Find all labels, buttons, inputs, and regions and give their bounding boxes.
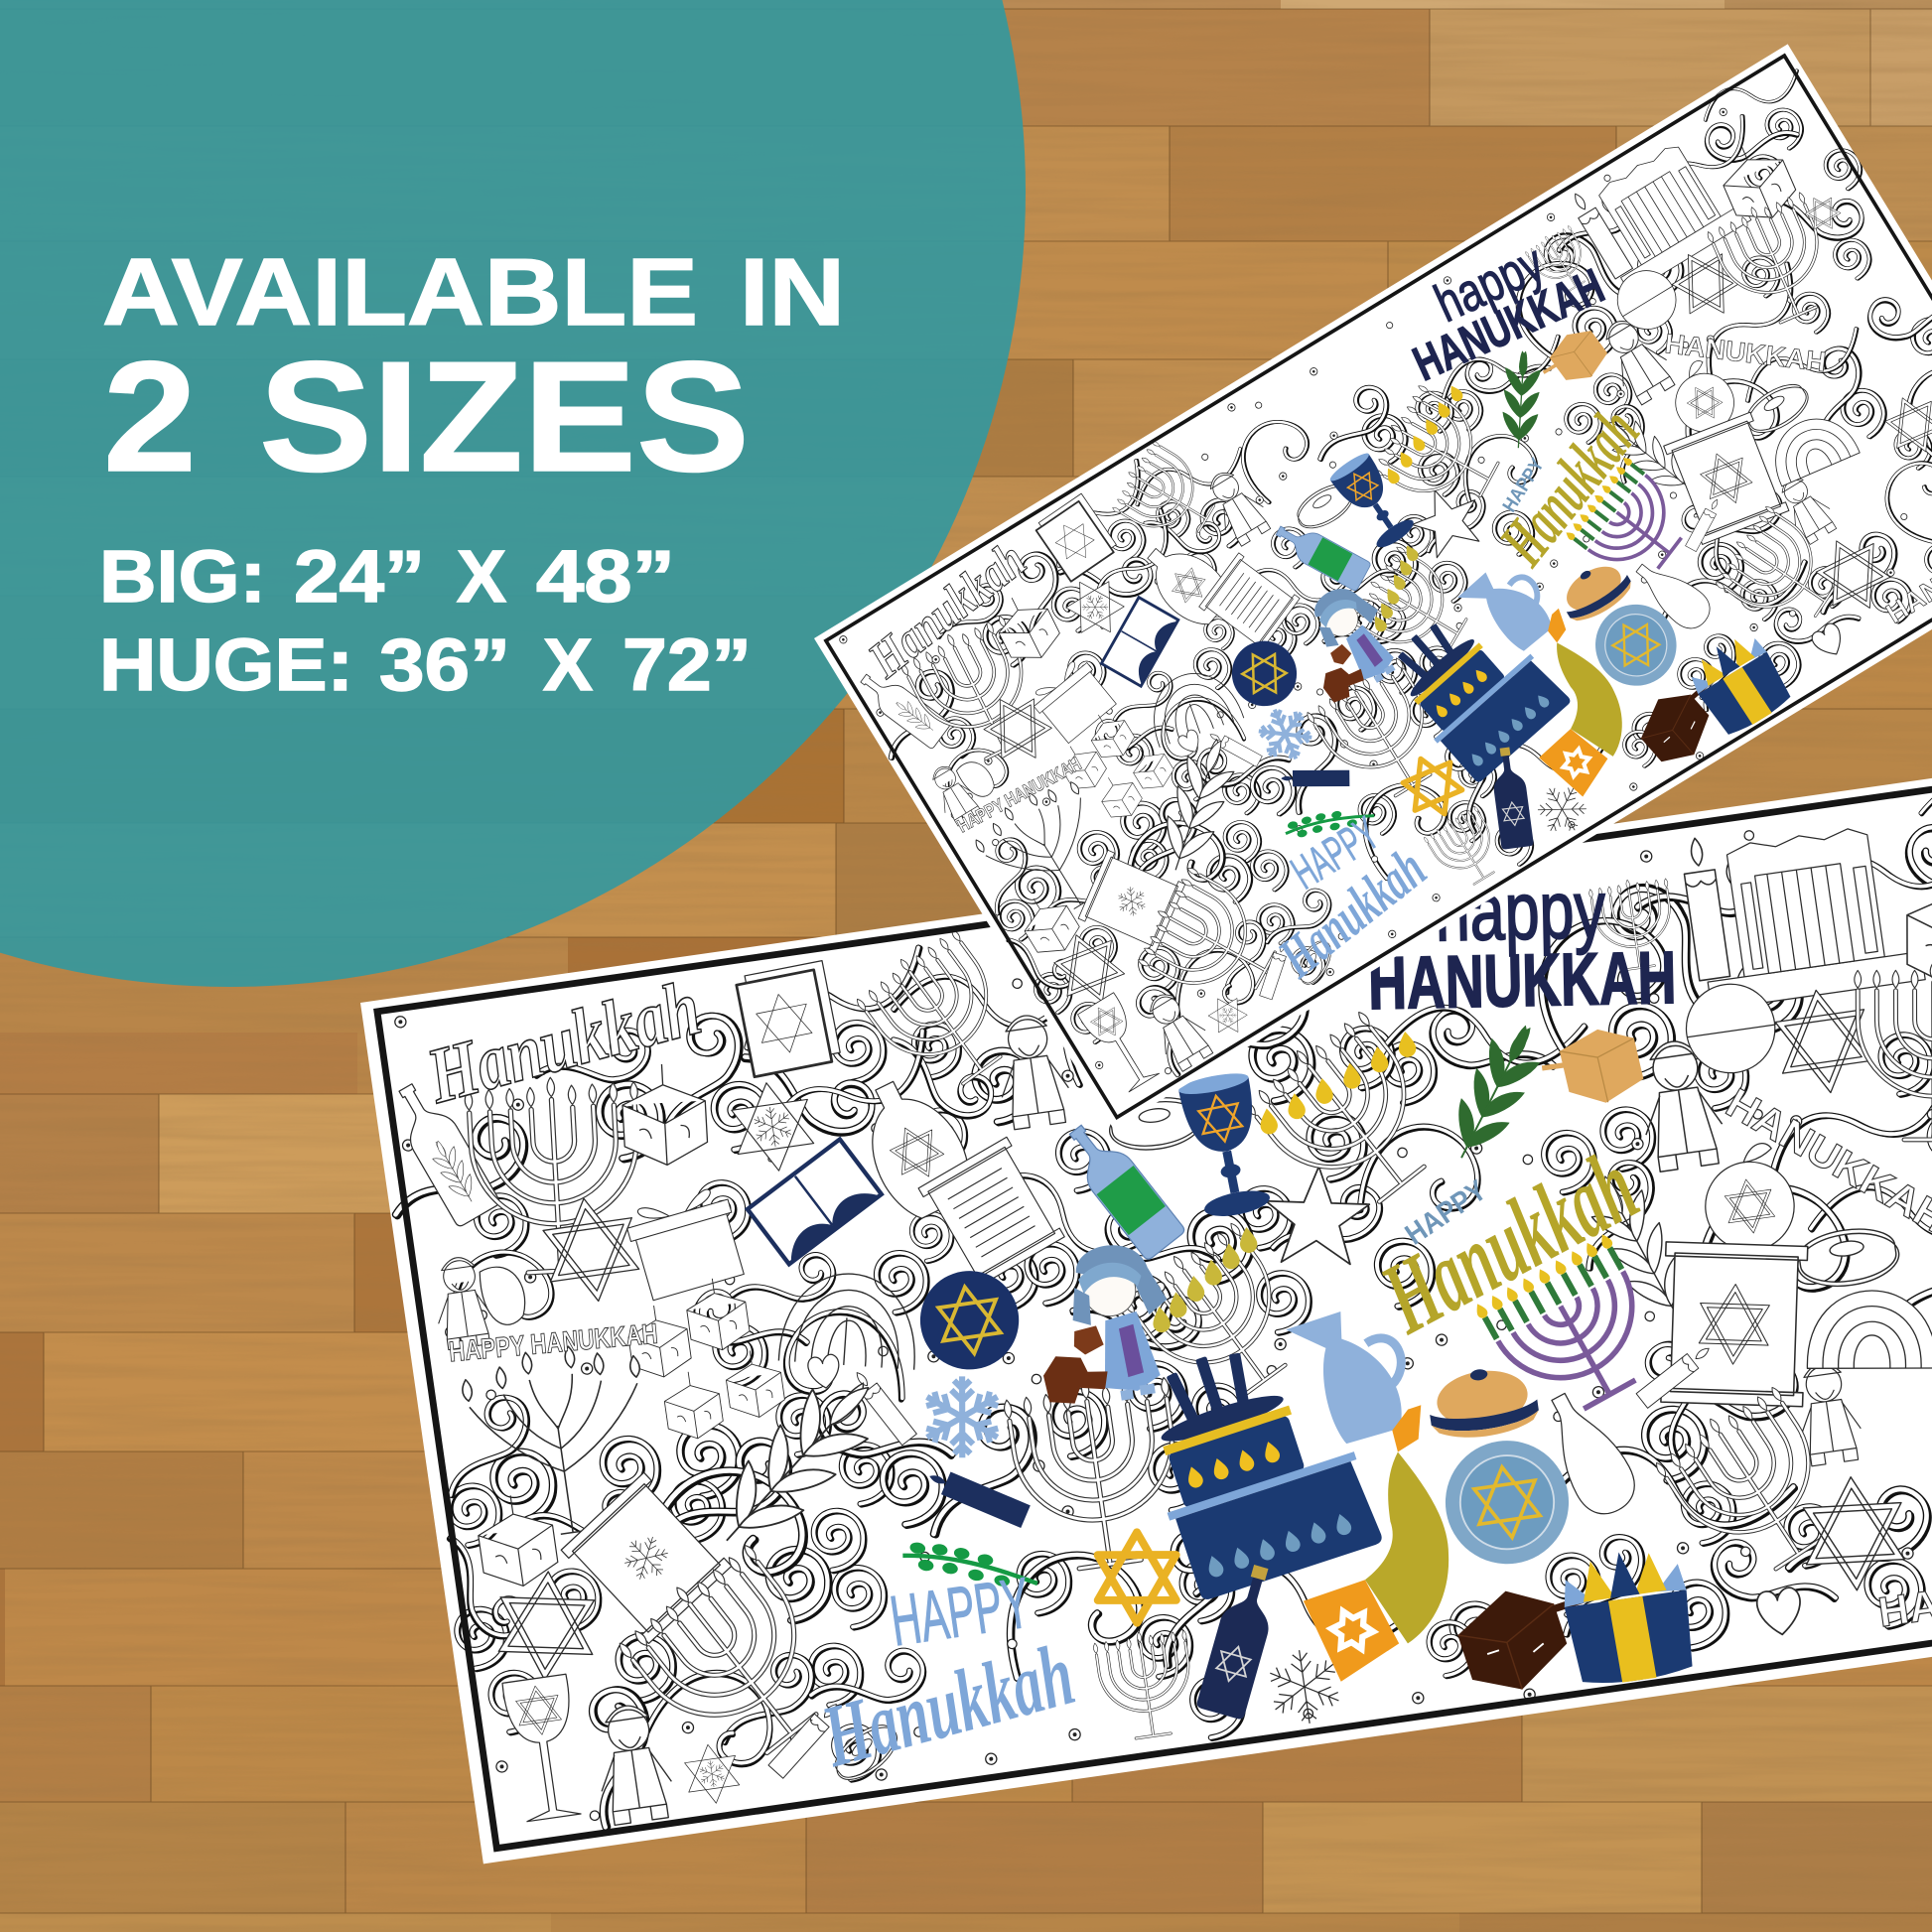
icon: menorah right bbox=[1855, 962, 1932, 1140]
poster: huge size, 36 x 72 bbox=[358, 754, 1932, 1864]
colored: purple menorah bbox=[1473, 1232, 1677, 1432]
text: HAPPY blue-grey: HAPPY bbox=[1400, 1173, 1492, 1252]
text: happy navy small: happy bbox=[1427, 233, 1553, 334]
heading: 2 sizes: 2 bbox=[103, 330, 197, 504]
text: happy navy: happy bbox=[1435, 865, 1606, 958]
colored: shofar bbox=[1348, 1447, 1461, 1648]
heading: 2 sizes: SIZES bbox=[259, 330, 750, 504]
icon: temple bbox=[1689, 821, 1925, 1010]
colored: hat bbox=[1425, 1362, 1541, 1444]
text: HAPPY light blue small: HAPPY bbox=[1283, 807, 1388, 899]
colored: plate bbox=[1438, 1433, 1577, 1572]
icon: character with scroll bbox=[991, 1011, 1073, 1131]
icon: dreidel group bbox=[621, 1271, 788, 1447]
icon: small menorah bbox=[1092, 1625, 1199, 1742]
icon: tilted menorah bbox=[852, 923, 1032, 1106]
poster border small bbox=[826, 56, 1932, 1117]
text: big size bbox=[99, 535, 675, 618]
icon: flask bbox=[1532, 1383, 1645, 1524]
text: HANUKKAH navy small: HANUKKAH bbox=[1406, 259, 1612, 391]
icon: torah scroll bbox=[918, 1137, 1064, 1288]
icon: star outline bbox=[497, 1570, 595, 1682]
icon: hexagon menorah bbox=[1237, 1004, 1461, 1231]
icon: man with broom bbox=[1633, 1036, 1727, 1173]
poster: big size, 24 x 48 bbox=[813, 36, 1932, 1130]
icon: apple with star bbox=[1698, 1140, 1800, 1257]
icon: heart right bbox=[1755, 1587, 1804, 1637]
text: huge size: 72” bbox=[622, 623, 752, 706]
text: Hanukkah gold small: Hanukkah bbox=[1485, 394, 1653, 579]
colored: gift bbox=[1558, 1544, 1698, 1689]
icon: arch menorah right bbox=[1807, 1291, 1932, 1368]
icon: large leaves bbox=[699, 1361, 894, 1566]
icon: prayer book bbox=[735, 961, 842, 1077]
icon: gift bbox=[622, 1184, 749, 1302]
poster text: big bbox=[838, 113, 1932, 1101]
icon: yellow-tip menorah bbox=[1119, 1216, 1319, 1421]
icon: candle lying bbox=[768, 1698, 844, 1778]
text: Hanukkah outline: Hanukkah bbox=[418, 964, 709, 1121]
colored: brown rocks bbox=[1037, 1325, 1111, 1408]
icon: doughnut bottom bbox=[826, 1716, 905, 1789]
text: huge size: HUGE: bbox=[99, 623, 353, 706]
icon: vase bbox=[845, 1066, 983, 1227]
text: Hanukkah light blue small: Hanukkah bbox=[1267, 836, 1438, 990]
icon: doughnut bbox=[1106, 1092, 1205, 1156]
icon: star cookie small bbox=[682, 1741, 742, 1807]
colored: cake bbox=[1125, 1321, 1384, 1603]
text: Hanukkah light blue: Hanukkah bbox=[812, 1625, 1084, 1786]
text: big size: X bbox=[457, 535, 506, 618]
icon: man with beard bbox=[591, 1701, 676, 1827]
colored: gold star bbox=[1098, 1532, 1176, 1623]
colored: navy bottle bbox=[1195, 1560, 1285, 1721]
text: huge size: 36” bbox=[379, 623, 510, 706]
text: Hanukkah outline small: Hanukkah bbox=[858, 530, 1036, 689]
icon: snowflake outline bbox=[1263, 1645, 1346, 1728]
icon: heart bbox=[807, 1353, 842, 1390]
colored: blue jug bbox=[1286, 1299, 1420, 1451]
colored: person in blue bbox=[1063, 1238, 1180, 1406]
icon: star of david bbox=[539, 1192, 642, 1308]
colored: blue snowflake bbox=[921, 1376, 1003, 1457]
icon: scroll with star bbox=[1661, 1242, 1808, 1407]
icon: star cookie bbox=[729, 1077, 817, 1176]
text: Happy Hanukkah outline: HAPPY HANUKKAH bbox=[448, 1318, 659, 1368]
poster text: huge bbox=[398, 791, 1932, 1833]
icon: dreidel right bbox=[1907, 869, 1932, 989]
icon: man with glasses bbox=[1791, 1359, 1865, 1467]
text: HAPPY light blue: HAPPY bbox=[886, 1564, 1035, 1662]
outline icons bbox=[370, 770, 1932, 1843]
colored: goblet bbox=[1177, 1069, 1274, 1221]
text: Happy Hanukkah outline small: HAPPY HANUKKAH bbox=[954, 753, 1084, 836]
icon: tall candle bbox=[1680, 836, 1730, 981]
heading: available in: AVAILABLE bbox=[102, 239, 698, 345]
text: big size: 48” bbox=[536, 535, 675, 618]
icon: dreidel bbox=[621, 1062, 709, 1168]
icon: five point star bbox=[1264, 1165, 1370, 1265]
colored: orange shofar wrap bbox=[1302, 1577, 1403, 1685]
heading: available in: IN bbox=[740, 239, 845, 345]
icon: arch menorah bbox=[778, 1270, 920, 1370]
text: HANUKKAH outline right small: HANUKKAH bbox=[1663, 328, 1828, 377]
text: big size: 24” bbox=[294, 535, 425, 618]
colored: yellow flame tips bbox=[1142, 1226, 1268, 1333]
icon: torah with snowflake bbox=[561, 1472, 732, 1643]
icon: star large bbox=[1802, 1474, 1906, 1592]
icon: bowl bbox=[1681, 978, 1781, 1079]
colored: yellow flame tips upper bbox=[1250, 1031, 1426, 1136]
icon: bottle with leaf bbox=[384, 1075, 501, 1228]
colored: green branch bbox=[900, 1538, 1041, 1592]
icon: person with rock bbox=[430, 1249, 530, 1350]
colored: navy candle bbox=[925, 1465, 1031, 1528]
icon: centre menorah bbox=[1002, 1369, 1192, 1576]
text: HAPPY blue-grey small: HAPPY bbox=[1498, 455, 1549, 516]
teal circle panel bbox=[0, 0, 1026, 987]
poster border bbox=[377, 769, 1932, 1849]
colored: navy coin with star bbox=[913, 1265, 1026, 1376]
colored: green bottle bbox=[1056, 1114, 1186, 1261]
text: huge size bbox=[99, 623, 752, 706]
icon: tilted menorah right bbox=[1650, 1380, 1859, 1593]
colored: open book bbox=[748, 1140, 882, 1264]
icon: doughnut right bbox=[1794, 1223, 1902, 1293]
icon: star outline right bbox=[1772, 984, 1875, 1099]
colored: brown dreidel bbox=[1449, 1567, 1611, 1703]
icon: large menorah bbox=[464, 1073, 647, 1276]
colored: tan dreidel bbox=[1536, 1022, 1647, 1115]
icon: branch outline bbox=[1578, 1165, 1704, 1332]
icon: kiddush cup bbox=[502, 1674, 586, 1822]
text: big size: BIG: bbox=[99, 535, 266, 618]
icon: tree menorah bbox=[459, 1337, 661, 1545]
icon: tilted candle menorah bbox=[612, 1537, 857, 1785]
colored: olive branch bbox=[1439, 1016, 1551, 1170]
text: Hanukkah gold: Hanukkah bbox=[1364, 1128, 1655, 1355]
icon: dreidel outline bbox=[474, 1490, 560, 1591]
text: huge size: X bbox=[543, 623, 593, 706]
icon: candle lying right bbox=[1636, 1341, 1715, 1408]
text: HANUKKAH navy: HANUKKAH bbox=[1367, 936, 1677, 1025]
icon: candle bbox=[850, 1367, 916, 1446]
icon: small top menorah bbox=[1587, 875, 1679, 973]
